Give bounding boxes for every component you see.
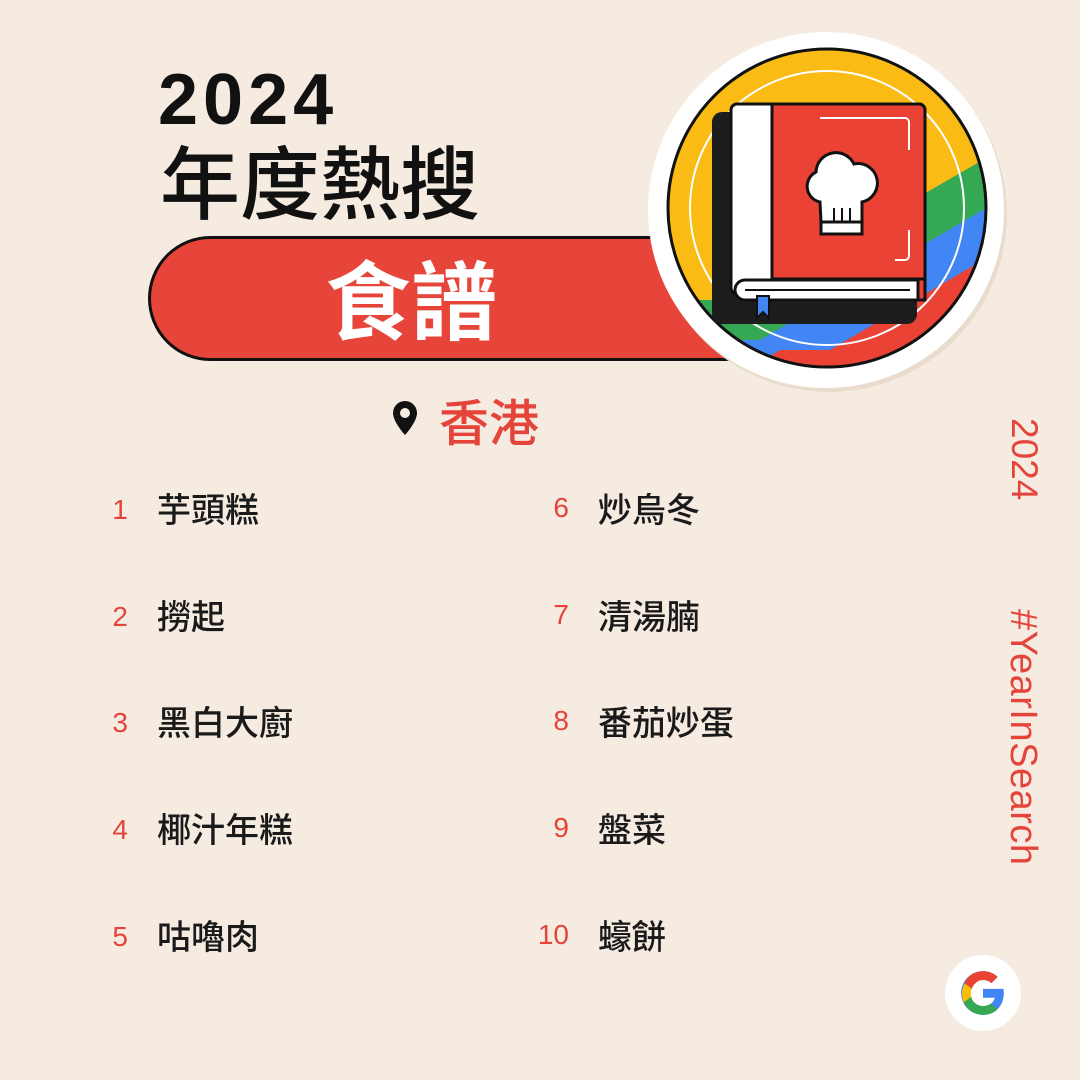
list: right column: 盤菜 bbox=[598, 803, 666, 852]
list: right column: 番茄炒蛋 bbox=[598, 696, 734, 745]
location: 香港 bbox=[393, 384, 539, 456]
list: left column: 芋頭糕 bbox=[157, 483, 259, 532]
icon: map pin bbox=[393, 401, 417, 435]
list: left column: 撈起 bbox=[157, 590, 225, 639]
list: left column bbox=[112, 483, 293, 959]
list: right column: 9 bbox=[553, 812, 569, 843]
list: left column: 1 bbox=[112, 494, 128, 525]
list: right column: 蠔餅 bbox=[598, 910, 666, 959]
title: 2024: 2024 bbox=[158, 60, 338, 140]
list: right column: 8 bbox=[553, 705, 569, 736]
list: right column: 10 bbox=[538, 919, 569, 950]
vertical text: 2024: 2024 bbox=[1004, 418, 1045, 500]
title: 年度熱搜: 年度熱搜 bbox=[160, 121, 480, 237]
list: left column: 4 bbox=[112, 814, 128, 845]
icon: Google logo bbox=[945, 955, 1021, 1031]
list: right column: 7 bbox=[553, 599, 569, 630]
list: left column: 咕嚕肉 bbox=[157, 910, 259, 959]
list: left column: 2 bbox=[112, 601, 128, 632]
list: left column: 黑白大廚 bbox=[157, 696, 293, 745]
list: right column: 清湯腩 bbox=[598, 590, 700, 639]
location name: 香港 bbox=[439, 384, 539, 456]
icon: recipe book badge bbox=[648, 32, 1007, 392]
list: left column: 3 bbox=[112, 707, 128, 738]
list: left column: 椰汁年糕 bbox=[157, 803, 293, 852]
category pill bbox=[148, 236, 788, 361]
vertical text: #YearInSearch: #YearInSearch bbox=[1002, 609, 1044, 866]
category text: 食譜: 食譜 bbox=[325, 233, 497, 358]
list: left column: 5 bbox=[112, 921, 128, 952]
list: right column bbox=[538, 483, 734, 959]
list: right column: 炒烏冬 bbox=[598, 483, 700, 532]
list: right column: 6 bbox=[553, 492, 569, 523]
